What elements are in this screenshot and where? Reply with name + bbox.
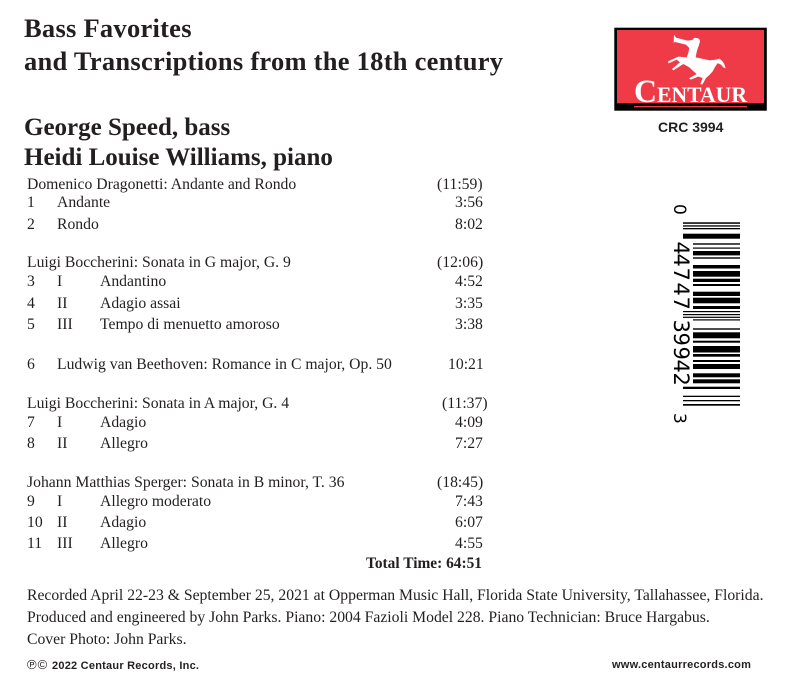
work: Dragonetti: Rondo [57, 216, 99, 233]
work: Sperger: III [57, 535, 73, 552]
work: Sperger [27, 474, 483, 552]
work: Boccherini G major: I [57, 273, 62, 290]
recording credits: Produced and engineered by John Parks. Piano: 2004 Fazioli Model 228. Piano Technician: Bruce Hargabus. [27, 609, 710, 626]
work: Boccherini A major: 7 [27, 414, 35, 431]
work: Sperger: Adagio [100, 514, 146, 531]
tracklist [27, 176, 488, 572]
work: Boccherini G major [27, 254, 483, 333]
work: Boccherini A major: (11:37) [442, 395, 488, 412]
work: Dragonetti: 1 [27, 194, 35, 211]
work: Boccherini G major: Adagio assai [100, 295, 181, 312]
recording credits: Cover Photo: John Parks. [27, 631, 186, 648]
work: Boccherini G major: III [57, 316, 73, 333]
work: Dragonetti: Andante [57, 194, 110, 211]
work: Boccherini A major: 4:09 [455, 414, 483, 431]
title [24, 13, 503, 76]
work: Sperger: (18:45) [437, 474, 483, 491]
work: Sperger: 7:43 [455, 493, 483, 510]
work: Boccherini A major: I [57, 414, 62, 431]
work: Sperger: I [57, 493, 62, 510]
title: and Transcriptions from the 18th century [24, 46, 503, 76]
work: Boccherini A major [27, 395, 488, 452]
work: Sperger: Allegro moderato [100, 493, 211, 510]
performers [24, 114, 333, 171]
work: Boccherini A major: 7:27 [455, 435, 483, 452]
work: Dragonetti: 3:56 [455, 194, 483, 211]
work: Boccherini G major: 3:35 [455, 295, 483, 312]
performers: George Speed, bass [24, 114, 230, 141]
logo wordmark: CENTAUR [634, 74, 748, 110]
work: Sperger: 11 [27, 535, 42, 552]
work: Boccherini G major: 3:38 [455, 316, 483, 333]
work: Sperger: II [57, 514, 67, 531]
work: Boccherini G major: Andantino [100, 273, 166, 290]
work: Sperger: Allegro [100, 535, 148, 552]
work: Boccherini G major: II [57, 295, 67, 312]
work: Boccherini G major: (12:06) [437, 254, 483, 271]
barcode [670, 204, 740, 424]
work: Boccherini A major: II [57, 435, 67, 452]
catalog number: CRC 3994 [658, 119, 723, 135]
work: Beethoven: 10:21 [448, 356, 484, 373]
work: Boccherini G major: 5 [27, 316, 35, 333]
work: Dragonetti: 2 [27, 216, 35, 233]
title: Bass Favorites [24, 13, 192, 43]
work: Boccherini A major: 8 [27, 435, 35, 452]
recording credits: Recorded April 22-23 & September 25, 2021 at Opperman Music Hall, Florida State University, Tallahassee, Florida. [27, 587, 764, 604]
logo: Centaur [614, 28, 767, 111]
recording credits [27, 587, 764, 648]
work: Boccherini G major: Luigi Boccherini: Sonata in G major, G. 9 [27, 254, 291, 271]
work: Boccherini G major: 4 [27, 295, 35, 312]
copyright: 2022 Centaur Records, Inc. [52, 660, 199, 672]
work: Dragonetti: Domenico Dragonetti: Andante and Rondo [27, 176, 296, 193]
total time: Total Time: 64:51 [366, 555, 482, 572]
work: Boccherini A major: Allegro [100, 435, 148, 452]
work: Boccherini G major: 3 [27, 273, 35, 290]
work: Dragonetti [27, 176, 483, 233]
work: Sperger: 4:55 [455, 535, 483, 552]
icon: centaur with trumpet [668, 35, 726, 85]
work: Sperger: Johann Matthias Sperger: Sonata in B minor, T. 36 [27, 474, 344, 491]
performers: Heidi Louise Williams, piano [24, 144, 333, 171]
barcode digits [669, 204, 693, 424]
work: Boccherini A major: Luigi Boccherini: Sonata in A major, G. 4 [27, 395, 289, 412]
work: Boccherini G major: 4:52 [455, 273, 483, 290]
work: Sperger: 9 [27, 493, 35, 510]
work: Beethoven: Ludwig van Beethoven: Romance in C major, Op. 50 [57, 356, 392, 373]
work: Boccherini A major: Adagio [100, 414, 146, 431]
barcode bars [683, 222, 740, 406]
work: Dragonetti: (11:59) [437, 176, 483, 193]
work: Beethoven: 6 [27, 356, 35, 373]
work: Sperger: 10 [27, 514, 43, 531]
work: Boccherini G major: Tempo di menuetto amoroso [100, 316, 280, 333]
work: Sperger: 6:07 [455, 514, 483, 531]
copyright [27, 657, 199, 672]
work: Dragonetti: 8:02 [455, 216, 483, 233]
copyright: ℗© [27, 657, 48, 672]
website: www.centaurrecords.com [612, 659, 751, 671]
